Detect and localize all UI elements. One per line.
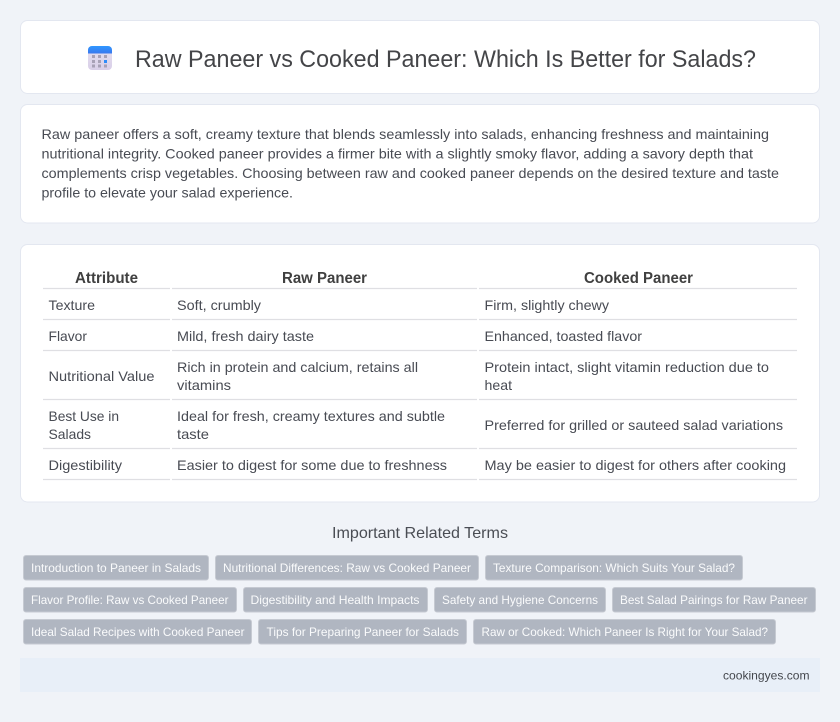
- row: texture: Texture: [48, 297, 95, 313]
- tag: Ideal Salad Recipes with Cooked Paneer: [31, 625, 244, 639]
- tag: [24, 556, 208, 580]
- row: flavor: [48, 328, 642, 344]
- tag: [24, 588, 236, 612]
- text block: description: complements crisp vegetables. Choosing between raw and cooked paneer depends on the desired texture and taste: [42, 165, 779, 181]
- row: nutritional value: Protein intact, slight vitamin reduction due to: [484, 359, 769, 375]
- row: flavor: Flavor: [48, 328, 87, 344]
- text block: description: nutritional integrity. Cooked paneer provides a firmer bite with a slightly smoky flavor, adding a savory depth that: [42, 146, 753, 162]
- text block: description: profile to elevate your salad experience.: [42, 184, 293, 200]
- row: nutritional value: Rich in protein and calcium, retains all: [177, 359, 418, 375]
- tag: [434, 588, 606, 612]
- row: digestibility: Easier to digest for some due to freshness: [177, 457, 447, 473]
- tag: [474, 620, 776, 644]
- tag: [24, 620, 252, 644]
- row: flavor: Enhanced, toasted flavor: [484, 328, 642, 344]
- panel: description: [20, 104, 820, 223]
- row: nutritional value: Nutritional Value: [48, 368, 155, 384]
- tag: Texture Comparison: Which Suits Your Salad?: [493, 561, 735, 575]
- icon: calendar: [88, 46, 112, 70]
- text block: description: [42, 126, 779, 200]
- table header: Cooked Paneer: [584, 270, 693, 287]
- tag: Nutritional Differences: Raw vs Cooked Paneer: [223, 561, 471, 575]
- tag: [216, 556, 478, 580]
- title: Raw Paneer vs Cooked Paneer: Which Is Better for Salads?: [135, 46, 756, 73]
- tag: [612, 588, 816, 612]
- panel: title header: [20, 20, 820, 94]
- table header: Raw Paneer: [282, 270, 367, 287]
- row: texture: [48, 297, 609, 313]
- row: best use in salads: [48, 408, 783, 442]
- row: flavor: Mild, fresh dairy taste: [177, 328, 314, 344]
- footer: [20, 658, 820, 692]
- row: texture: Firm, slightly chewy: [484, 297, 609, 313]
- tag: Safety and Hygiene Concerns: [442, 593, 598, 607]
- tag: [244, 588, 428, 612]
- related terms tags: [24, 556, 816, 644]
- row: best use in salads: Salads: [48, 426, 91, 442]
- row: best use in salads: Preferred for grilled or sauteed salad variations: [484, 417, 783, 433]
- row: nutritional value: vitamins: [177, 377, 231, 393]
- tag: Introduction to Paneer in Salads: [31, 561, 201, 575]
- tag: Raw or Cooked: Which Paneer Is Right for Your Salad?: [482, 625, 768, 639]
- tag: Best Salad Pairings for Raw Paneer: [620, 593, 808, 607]
- text block: description: Raw paneer offers a soft, creamy texture that blends seamlessly into salads, enhancing freshness and maintaining: [42, 126, 769, 142]
- tag: Tips for Preparing Paneer for Salads: [266, 625, 459, 639]
- heading: important related terms: Important Related Terms: [332, 525, 508, 542]
- row: digestibility: [48, 457, 786, 473]
- footer source: cookingyes.com: [723, 668, 810, 682]
- row: best use in salads: Ideal for fresh, creamy textures and subtle: [177, 408, 445, 424]
- tag: Digestibility and Health Impacts: [250, 593, 420, 607]
- table header: [75, 270, 693, 287]
- row: digestibility: Digestibility: [48, 457, 122, 473]
- tag: [258, 620, 466, 644]
- row: nutritional value: heat: [484, 377, 512, 393]
- row: digestibility: May be easier to digest for others after cooking: [484, 457, 786, 473]
- row: best use in salads: taste: [177, 426, 209, 442]
- row: texture: Soft, crumbly: [177, 297, 261, 313]
- tag: Flavor Profile: Raw vs Cooked Paneer: [31, 593, 229, 607]
- panel: comparison table: [20, 244, 820, 502]
- row: best use in salads: Best Use in: [48, 408, 119, 424]
- tag: [486, 556, 742, 580]
- table header: Attribute: [75, 270, 138, 287]
- row: nutritional value: [48, 359, 769, 393]
